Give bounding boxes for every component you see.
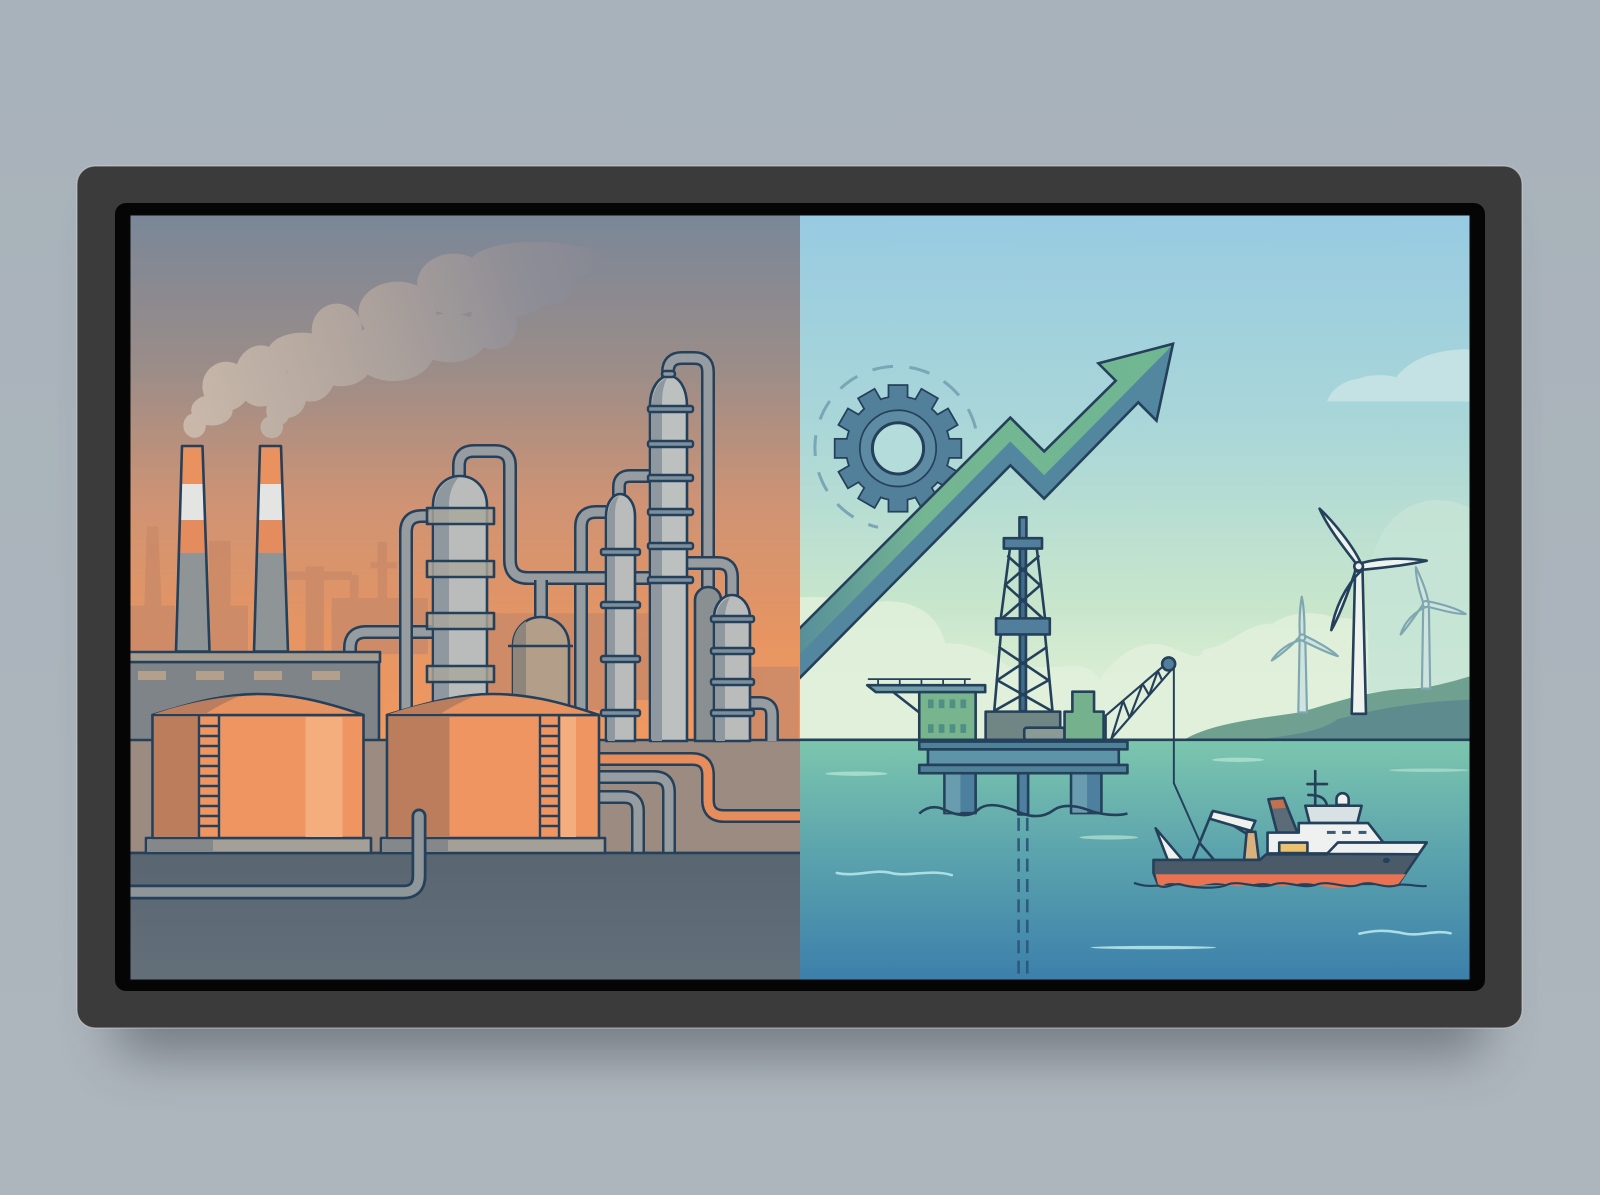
monitor frame: [77, 166, 1522, 1028]
tank 2 ladder: [540, 716, 559, 838]
bridge: [1305, 806, 1362, 823]
panel: offshore and renewables (right half): [791, 215, 1472, 980]
deck modules: [986, 692, 1104, 740]
chimney 2: [254, 446, 288, 652]
main wind turbine: [1320, 509, 1427, 714]
yellow hatch: [1279, 843, 1307, 853]
drill string below sea: [1019, 818, 1027, 979]
offshore platform: [867, 517, 1214, 860]
distant factory silhouettes: [130, 527, 799, 743]
storage tank 1: [146, 694, 371, 853]
dashed gear halo: [815, 366, 976, 527]
lower apron: [128, 853, 802, 982]
superstructure: [1268, 823, 1383, 853]
sky: [800, 215, 1470, 740]
chimney 1: [176, 446, 210, 652]
background wind turbine 1: [1272, 597, 1338, 712]
derrick: [994, 517, 1052, 711]
water highlights: [825, 758, 1469, 949]
horizon line: [796, 737, 1472, 743]
hills: [1184, 676, 1472, 740]
medium column: [601, 494, 640, 741]
survey vessel: [1134, 771, 1427, 888]
tank 1 ladder: [199, 716, 219, 838]
smoke plumes: [183, 242, 604, 438]
background wind turbine 2: [1401, 567, 1466, 689]
low factory building: [128, 652, 380, 747]
legs and deck: [919, 742, 1127, 814]
accommodation block: [919, 692, 976, 740]
large distillation tower: [427, 476, 494, 710]
pipe behind building: [350, 632, 432, 656]
top-right cloud: [1327, 349, 1472, 402]
short column: [711, 595, 754, 741]
platform waterline: [919, 805, 1127, 816]
dusk sky: [130, 215, 800, 740]
growth arrow: [791, 344, 1173, 686]
helideck: [867, 679, 985, 712]
aft fin: [1156, 828, 1183, 860]
frame shadow: [115, 215, 1485, 1055]
panel: refinery (left half): [126, 215, 802, 982]
background pipework: [406, 358, 772, 741]
mast: [1307, 771, 1327, 806]
small domed vessel: [508, 617, 573, 710]
radar dome: [1336, 793, 1349, 805]
foreground pipe: [126, 816, 419, 892]
tall fractionating column: [648, 371, 693, 741]
ground band: [128, 740, 802, 853]
ground pipes right of tank: [598, 759, 802, 855]
storage tank 2: [381, 694, 605, 853]
rear grey vessel: [695, 587, 721, 741]
background clouds: [796, 500, 1472, 740]
crane: [1106, 657, 1214, 860]
sea: [800, 740, 1470, 980]
funnel: [1268, 798, 1297, 833]
infographic illustration: [76, 166, 1522, 1080]
gear icon: [836, 386, 960, 511]
screen bezel edge: [130, 215, 1470, 980]
hull: [1153, 843, 1427, 884]
a-frame crane: [1192, 812, 1251, 860]
